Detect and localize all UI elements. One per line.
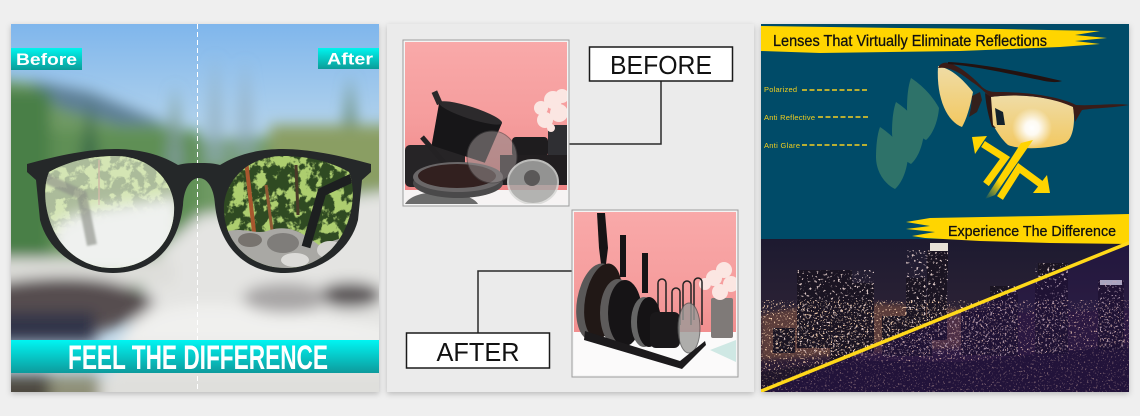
right lens: sharp view: [224, 156, 353, 268]
left nose pad: [969, 92, 982, 117]
brow frame and temple: [938, 63, 1129, 122]
before label: BEFORE: [610, 50, 712, 80]
right rim and nose pad: [985, 93, 996, 128]
before tag: [11, 48, 82, 70]
bottom brush banner: [906, 214, 1129, 244]
vase and flowers: [711, 298, 733, 338]
top brush banner: Lenses That Virtually Eliminate Reflections: [773, 33, 1047, 50]
incoming beam: [985, 140, 1033, 199]
lens layer labels: [764, 85, 869, 150]
after label: AFTER: [436, 337, 520, 367]
before tag: Before: [16, 51, 77, 69]
anti glare label: Anti Glare: [764, 141, 800, 150]
panel: feel the difference glasses: [0, 24, 400, 410]
anti reflective label: Anti Reflective: [764, 113, 815, 122]
bottom brush banner: Experience The Difference: [948, 223, 1116, 240]
after tag: [318, 48, 379, 69]
after photo: [571, 210, 739, 377]
left lens: hazy view: [45, 156, 174, 268]
left lens: [938, 66, 973, 127]
before connector: [569, 81, 661, 144]
big frying pan: [413, 180, 503, 198]
bottom lid: [405, 192, 478, 204]
polarized label: Polarized: [764, 85, 797, 94]
frame: [27, 149, 371, 273]
before photo: [403, 40, 569, 206]
after label: [406, 333, 550, 368]
feel the difference banner: FEEL THE DIFFERENCE: [68, 339, 328, 377]
sunglasses: [938, 62, 1129, 148]
rack wires: [658, 278, 702, 325]
back pots: [512, 137, 548, 157]
centre dashed divider: [197, 24, 198, 389]
pans in rack: [597, 213, 608, 264]
feel the difference banner: [11, 340, 379, 373]
upper temple arm: [948, 62, 1062, 82]
ground glow: [761, 357, 832, 372]
panel: pan organizer before and after: [387, 24, 754, 392]
after tag: After: [327, 50, 374, 68]
before label: [590, 47, 732, 81]
panel: reflection-free lenses: [759, 24, 1131, 392]
diagonal yellow divider: [759, 242, 1131, 392]
lens layers icon: [876, 78, 939, 189]
after connector: [478, 271, 572, 333]
night sky and city: [761, 239, 1129, 392]
blurred landscape background: [11, 24, 379, 392]
purple tint below diagonal: [761, 243, 1129, 392]
vase and flowers: [548, 125, 567, 157]
left deflected arrow: [972, 136, 1005, 184]
right lens: [990, 95, 1074, 148]
glass lids: [467, 131, 517, 183]
top brush banner: [761, 26, 1107, 53]
city glitter: [761, 300, 1129, 392]
window lights: [773, 250, 1124, 356]
tower crown lights: [930, 243, 948, 251]
tilted saucepan: [432, 90, 502, 163]
glasses: [27, 149, 371, 275]
glare highlight: [1012, 108, 1052, 148]
rack base: [584, 331, 706, 369]
right deflected arrow: [1000, 168, 1050, 198]
reflection arrows: [972, 136, 1050, 199]
dark foreground: [761, 345, 1129, 392]
buildings: [773, 243, 1124, 360]
